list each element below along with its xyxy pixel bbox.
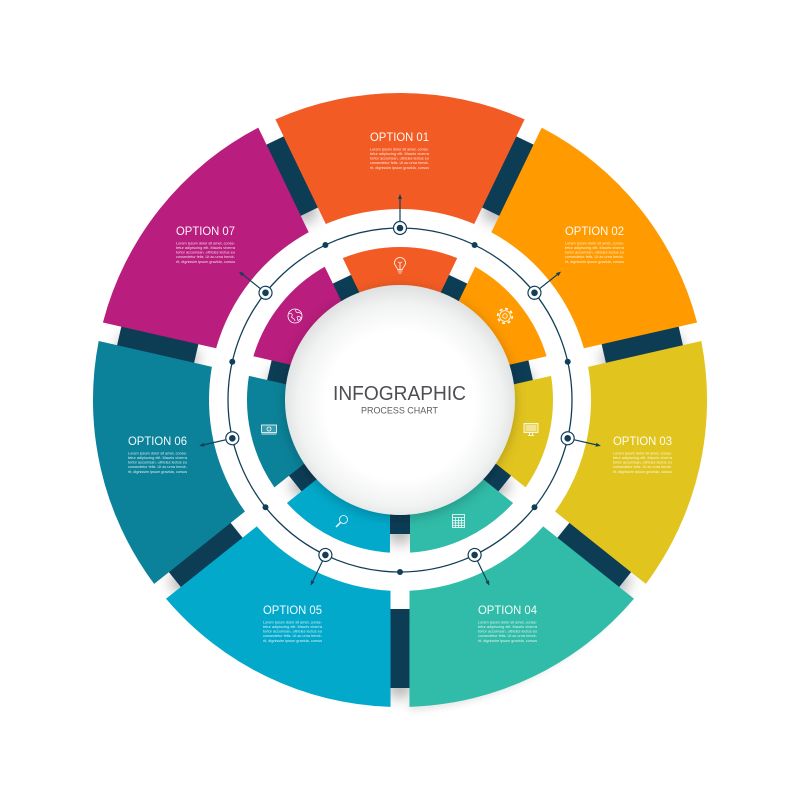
arrow and node: option 04 [466, 546, 495, 588]
arrow and node: option 01 [394, 194, 406, 234]
segment: option 04 [364, 505, 645, 731]
text block: option 05: Lorem ipsum dolor sit amet, conse- [263, 619, 323, 624]
band: outer 5-6 [168, 522, 243, 588]
icon: light bulb [394, 258, 406, 273]
text block: option 07: Lorem ipsum dolor sit amet, conse- [176, 240, 236, 245]
segment: option 02 [460, 111, 718, 388]
text block: option 01 [370, 132, 430, 170]
text block: option 01: Lorem ipsum dolor sit amet, conse- [370, 146, 430, 151]
text block: option 01: OPTION 01 [370, 132, 429, 144]
band: inner 7-1 [332, 274, 365, 311]
band: outer 2-3 [601, 325, 683, 364]
text block: option 02: tetur adipiscing elit. Mauris viverra [565, 245, 625, 250]
text block: option 07: OPTION 07 [176, 226, 235, 238]
band: inner 2-3 [499, 359, 533, 388]
icon: globe [288, 309, 302, 323]
center title [333, 383, 466, 416]
text block: option 03: Lorem ipsum dolor sit amet, conse- [613, 450, 673, 455]
text block: option 05: tetur adipiscing elit. Mauris viverra [263, 624, 323, 629]
text block: option 04: tortor accumsan, ultricies lectus eu [478, 629, 537, 634]
text block: option 02 [565, 226, 625, 264]
text block: option 05 [263, 605, 323, 643]
text block: option 06: tortor accumsan, ultricies lectus eu [128, 460, 187, 465]
arrow and node: option 03 [560, 430, 602, 452]
arrow and node: option 07 [235, 266, 275, 302]
text block: option 07: rit, dignissim ipsum gravida, cursus [176, 259, 235, 264]
text block: option 06: OPTION 06 [128, 436, 187, 448]
band: outer 4-5 [389, 609, 411, 688]
text block: option 03: rit, dignissim ipsum gravida, cursus [613, 469, 672, 474]
text block: option 07 [176, 226, 236, 264]
segment: option 07 [82, 111, 340, 388]
segment: option 06 [73, 318, 256, 590]
arrow and node: option 06 [198, 430, 240, 452]
connector ring line [228, 228, 572, 572]
text block: option 01: consectetur felis. Ut ac urna hendr- [370, 160, 430, 165]
band: outer 1-2 [481, 136, 535, 216]
band: inner 6-7 [267, 359, 301, 388]
segment: option 01 [275, 93, 525, 224]
text block: option 05: consectetur felis. Ut ac urna hendr- [263, 633, 323, 638]
inner segment 04 [393, 468, 518, 563]
band: inner 1-2 [435, 274, 468, 311]
text block: option 04: tetur adipiscing elit. Mauris viverra [478, 624, 538, 629]
text block: option 04: consectetur felis. Ut ac urna hendr- [478, 633, 538, 638]
inner segment 07 [245, 260, 355, 381]
inner segment 01 [343, 247, 457, 297]
arrow and node: option 05 [305, 546, 334, 588]
text block: option 02: rit, dignissim ipsum gravida, cursus [565, 259, 624, 264]
segment: option 05 [155, 505, 436, 731]
center circle [285, 285, 515, 515]
outer ring segments [73, 93, 727, 731]
text block: option 04 [478, 605, 538, 643]
text block: option 06: Lorem ipsum dolor sit amet, conse- [128, 450, 188, 455]
text block: option 07: tetur adipiscing elit. Mauris viverra [176, 245, 236, 250]
text block: option 02: tortor accumsan, ultricies lectus eu [565, 250, 624, 255]
text block: option 06: tetur adipiscing elit. Mauris viverra [128, 455, 188, 460]
segment: option 03 [544, 318, 727, 590]
band: inner 5-6 [288, 456, 326, 492]
text block: option 07: consectetur felis. Ut ac urna hendr- [176, 254, 236, 259]
text block: option 07: tortor accumsan, ultricies lectus eu [176, 250, 235, 255]
text block: option 01: tortor accumsan, ultricies lectus eu [370, 156, 429, 161]
text block: option 02: Lorem ipsum dolor sit amet, conse- [565, 240, 625, 245]
band: inner 4-5 [389, 504, 411, 534]
chart soft shadow [409, 595, 628, 707]
text block: option 04: OPTION 04 [478, 605, 538, 617]
text block: option 03 [613, 436, 673, 474]
text block: option 03: tortor accumsan, ultricies lectus eu [613, 460, 672, 465]
band: outer 6-7 [117, 325, 199, 364]
ring small dots [229, 242, 571, 575]
text block: option 03: consectetur felis. Ut ac urna hendr- [613, 464, 673, 469]
text block: option 02: consectetur felis. Ut ac urna hendr- [565, 254, 625, 259]
text block: option 05: rit, dignissim ipsum gravida, cursus [263, 638, 322, 643]
text block: option 05: tortor accumsan, ultricies lectus eu [263, 629, 322, 634]
inner segment 02 [445, 260, 555, 381]
inner segment 05 [282, 468, 407, 563]
inner segment 03 [488, 367, 562, 490]
arrow and node: option 02 [525, 266, 565, 302]
text block: option 02: OPTION 02 [565, 226, 624, 238]
text block: option 06 [128, 436, 188, 474]
band: inner 3-4 [474, 456, 512, 492]
text block: option 04: rit, dignissim ipsum gravida, cursus [478, 638, 537, 643]
inner segment 06 [238, 367, 312, 490]
icon: banknote [262, 425, 276, 434]
text block: option 03: OPTION 03 [613, 436, 672, 448]
icon: magnifier [336, 516, 348, 527]
band: outer 3-4 [557, 522, 632, 588]
text block: option 05: OPTION 05 [263, 605, 322, 617]
text block: option 03: tetur adipiscing elit. Mauris viverra [613, 455, 673, 460]
text block: option 01: rit, dignissim ipsum gravida, cursus [370, 165, 429, 170]
band: outer 7-1 [265, 136, 319, 216]
text block: option 01: tetur adipiscing elit. Mauris viverra [370, 151, 430, 156]
center title: INFOGRAPHIC [333, 383, 466, 405]
center title: PROCESS CHART [361, 406, 438, 416]
dark connector bands [117, 136, 683, 688]
text block: option 06: rit, dignissim ipsum gravida, cursus [128, 469, 187, 474]
text block: option 04: Lorem ipsum dolor sit amet, conse- [478, 619, 538, 624]
text block: option 06: consectetur felis. Ut ac urna hendr- [128, 464, 188, 469]
icon: gear [498, 309, 512, 323]
icon: calendar [452, 514, 464, 528]
inner ring segments [238, 247, 562, 563]
icon: monitor [524, 424, 538, 436]
